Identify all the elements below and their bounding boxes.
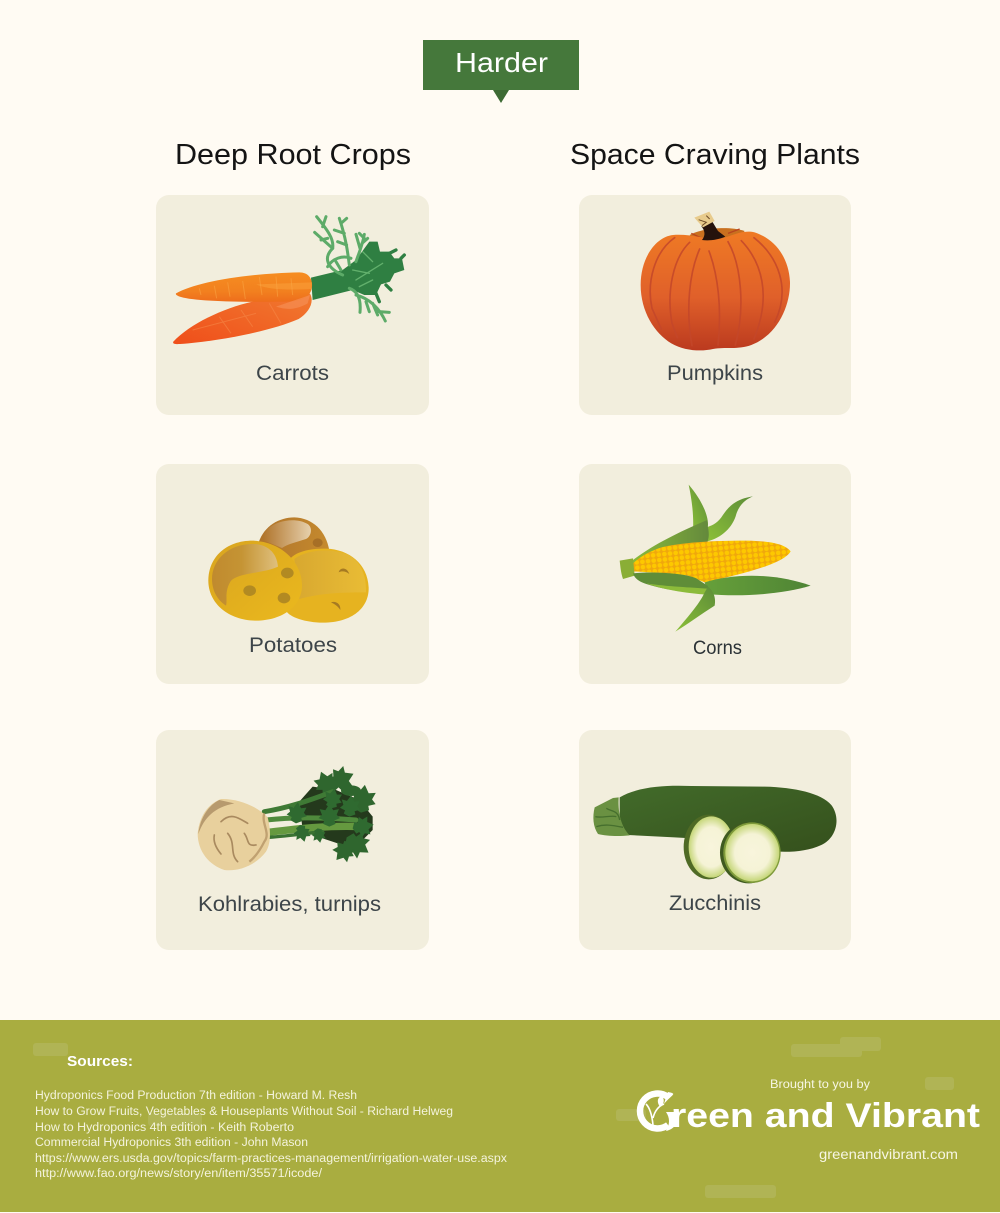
heading: Deep Root Crops: Deep Root Crops: [175, 139, 411, 171]
label: Pumpkins: Pumpkins: [667, 362, 763, 385]
label: Potatoes: Potatoes: [249, 634, 337, 657]
sources list: http://www.fao.org/news/story/en/item/35571/icode/: [35, 1168, 323, 1180]
sources list: Hydroponics Food Production 7th edition - Howard M. Resh: [35, 1090, 357, 1102]
logo: Green and Vibrant: [640, 1092, 980, 1135]
panel: footer: [0, 1020, 1000, 1212]
panel: corns: [579, 464, 851, 684]
icon: carrots: [173, 217, 404, 344]
icon: potatoes: [208, 517, 369, 623]
label: Zucchinis: Zucchinis: [669, 892, 761, 915]
sources list: How to Grow Fruits, Vegetables & Houseplants Without Soil - Richard Helweg: [35, 1106, 453, 1118]
banner: Harder: [423, 40, 579, 103]
label: Corns: Corns: [693, 638, 742, 659]
panel: zucchinis: [579, 730, 851, 950]
banner: Harder: Harder: [455, 47, 548, 78]
sources list: Commercial Hydroponics 3th edition - John Mason: [35, 1137, 308, 1149]
label: Kohlrabies, turnips: Kohlrabies, turnips: [198, 893, 381, 916]
sources list: How to Hydroponics 4th edition - Keith Roberto: [35, 1122, 294, 1134]
sources list: https://www.ers.usda.gov/topics/farm-practices-management/irrigation-water-use.aspx: [35, 1153, 507, 1165]
logo: Green and Vibrant: reen and Vibrant: [671, 1097, 980, 1135]
panel: potatoes: [156, 464, 429, 684]
icon: zucchini: [593, 786, 837, 883]
panel: pumpkins: [579, 195, 851, 415]
panel: kohlrabies, turnips: [156, 730, 429, 950]
icon: pumpkin: [641, 212, 790, 350]
sources list: [35, 1090, 507, 1180]
sources heading: Sources:: [67, 1053, 133, 1070]
label: Carrots: Carrots: [256, 362, 329, 385]
brought to you by: Brought to you by: [770, 1079, 870, 1091]
panel: carrots: [156, 195, 429, 415]
icon: kohlrabi: [198, 762, 378, 870]
icon: corn: [620, 485, 811, 632]
website: greenandvibrant.com: [819, 1147, 958, 1162]
heading: Space Craving Plants: Space Craving Plants: [570, 139, 860, 171]
